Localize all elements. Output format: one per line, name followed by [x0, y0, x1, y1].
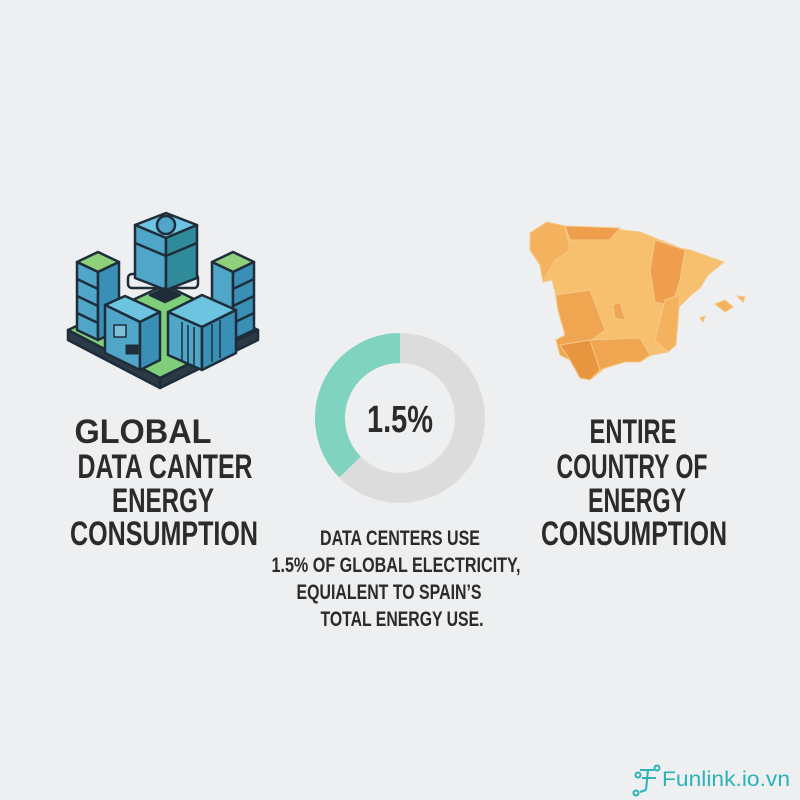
title: right: COUNTRY OF — [556, 448, 708, 486]
logo: Funlink.io.vn — [662, 768, 790, 791]
title: left: ENERGY — [112, 482, 214, 520]
title: right: ENTIRE — [590, 413, 676, 451]
caption: 1.5% OF GLOBAL ELECTRICITY, — [272, 554, 520, 577]
icon: data center — [68, 213, 258, 388]
front left cabinet — [105, 296, 160, 370]
donut chart — [330, 348, 470, 488]
platform — [68, 285, 258, 388]
title: right: ENERGY — [588, 482, 686, 520]
title: left: DATA CANTER — [78, 448, 252, 486]
logo — [634, 766, 790, 796]
map: Spain — [530, 222, 745, 380]
donut chart: 1.5% — [367, 399, 433, 441]
left rack — [77, 252, 119, 340]
right rack — [212, 252, 254, 340]
title: right — [541, 413, 727, 553]
front right cabinet — [168, 295, 236, 370]
title: left — [70, 413, 258, 553]
caption — [272, 527, 520, 631]
caption: DATA CENTERS USE — [320, 527, 480, 550]
title: left: CONSUMPTION — [70, 515, 258, 553]
center tower — [128, 213, 198, 302]
title: left: GLOBAL — [74, 413, 212, 451]
caption: TOTAL ENERGY USE. — [320, 608, 484, 631]
title: right: CONSUMPTION — [541, 515, 727, 553]
caption: EQUIALENT TO SPAIN’S — [296, 581, 482, 604]
